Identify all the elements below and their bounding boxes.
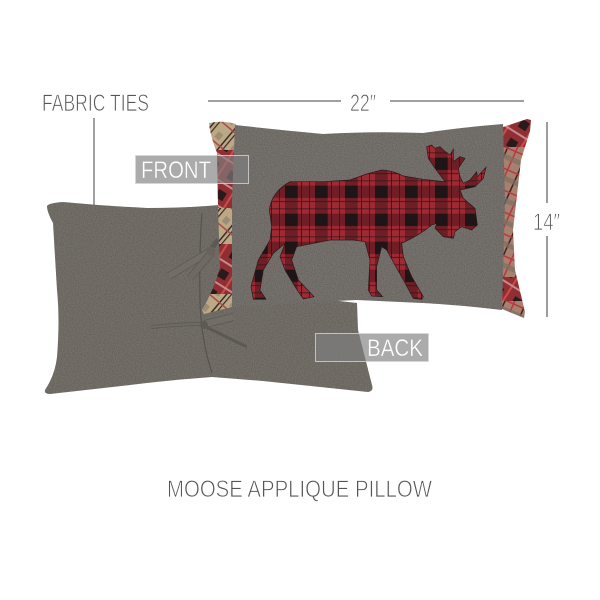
back pillow (45, 202, 372, 394)
tag: front (136, 156, 248, 184)
tag: front: FRONT (141, 157, 211, 184)
dimension: width 22 inches: 22″ (350, 90, 376, 117)
label: fabric ties: FABRIC TIES (42, 90, 149, 117)
grey front panel (232, 124, 505, 310)
moose applique (251, 145, 486, 299)
tag: back (316, 334, 428, 362)
dimension: height 14 inches: 14″ (533, 209, 560, 236)
front pillow (200, 115, 535, 321)
tag: back: BACK (367, 335, 423, 362)
label: fabric ties (42, 90, 149, 205)
seam (200, 213, 212, 373)
title: MOOSE APPLIQUE PILLOW (167, 476, 433, 503)
lower fabric tie (151, 317, 247, 347)
upper fabric tie (169, 240, 218, 278)
right plaid strip (502, 119, 531, 318)
left plaid strip (202, 122, 236, 314)
